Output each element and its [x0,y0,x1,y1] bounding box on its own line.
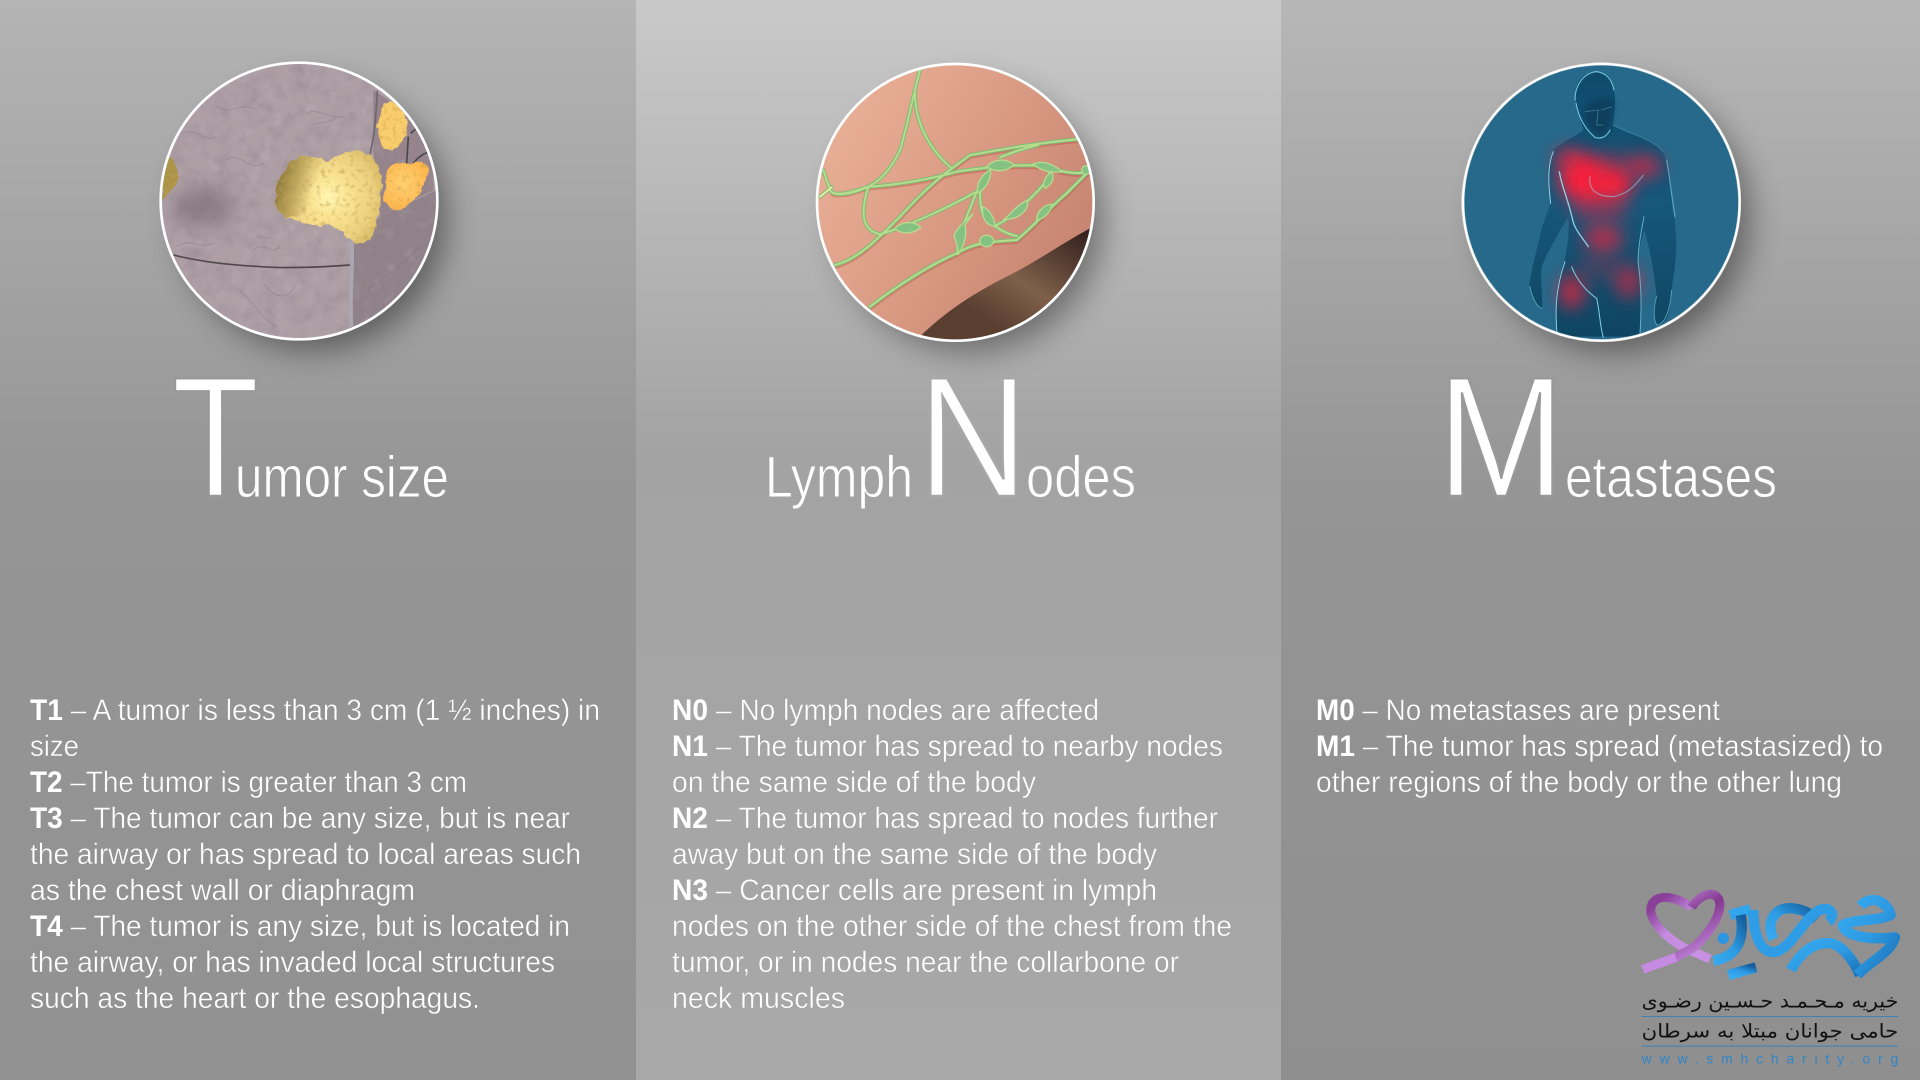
title: Tumor size: T [172,342,259,533]
lymph nodes [895,160,1090,254]
panel: lymph nodes [636,0,1281,1080]
tumor: upper right nodule [378,102,408,150]
text block: T stages: the airway or has spread to local areas such [30,838,581,871]
text block: N stages: N0 – No lymph nodes are affected [672,694,1099,727]
text block: T stages: size [30,730,79,763]
text block: N stages: N1 – The tumor has spread to nearby nodes [672,730,1223,763]
title: Metastases [1437,342,1777,533]
text block: T stages: as the chest wall or diaphragm [30,874,415,907]
text block: M stages: other regions of the body or the other lung [1316,766,1842,799]
rim light lines [1530,72,1675,337]
title: Lymph Nodes [765,342,1136,533]
text block: N stages: N3 – Cancer cells are present in lymph [672,874,1157,907]
title: Tumor size: umor size [235,445,449,510]
text block: N stages: on the same side of the body [672,766,1036,799]
text block: T stages: T3 – The tumor can be any size, but is near [30,802,570,835]
text block: N stages: nodes on the other side of the chest from the [672,910,1232,943]
icon: lung tumor circle [157,60,447,350]
icon: human body metastases circle [1460,60,1749,351]
head shading [1583,99,1614,137]
text block: T stages: T4 – The tumor is any size, but is located in [30,910,570,943]
text block: T stages: T1 – A tumor is less than 3 cm (1 ½ inches) in [30,694,600,727]
panel: tumor size [0,0,636,1080]
website: www.smhcharity.org [1641,1050,1898,1066]
metastasis glows [1554,148,1662,309]
text block: T stages: the airway, or has invaded local structures [30,946,555,979]
tumor: main gold mass [275,151,382,245]
text block: M stages: M0 – No metastases are present [1316,694,1721,727]
text block: T stages: such as the heart or the esophagus. [30,982,480,1015]
icon: heart ribbon [1643,894,1720,969]
text block: N stages: neck muscles [672,982,845,1015]
text block: N stages: N2 – The tumor has spread to nodes further [672,802,1218,835]
text block: M stages: M1 – The tumor has spread (metastasized) to [1316,730,1883,763]
text block: M stages [1316,694,1883,799]
text block: N stages: away but on the same side of the body [672,838,1157,871]
title: Tumor size [172,342,449,533]
title: Lymph Nodes: Lymph [765,445,913,510]
lung surface veins [177,107,420,327]
icon: blue calligraphy ribbon [1713,900,1895,975]
text block: N stages [672,694,1232,1015]
panel: metastases [1281,0,1920,1080]
title: Lymph Nodes: N [918,342,1028,533]
title: Metastases: M [1437,342,1565,533]
logo: charity [1641,894,1898,1066]
title: Metastases: etastases [1565,445,1777,510]
icon: lymph nodes circle [813,60,1103,351]
persian tagline: حامی جوانان مبتلا به سرطان [1642,1019,1898,1042]
text block: T stages: T2 –The tumor is greater than 3 cm [30,766,467,799]
persian charity name: خیریه مـحـمـد حـسـین رضـوی [1642,989,1898,1012]
text block: T stages [30,694,600,1015]
text block: N stages: tumor, or in nodes near the collarbone or [672,946,1179,979]
tumor: left edge [163,156,178,198]
body silhouette [1529,72,1676,337]
tumor: right nodule [383,162,428,211]
title: Lymph Nodes: odes [1026,445,1136,510]
